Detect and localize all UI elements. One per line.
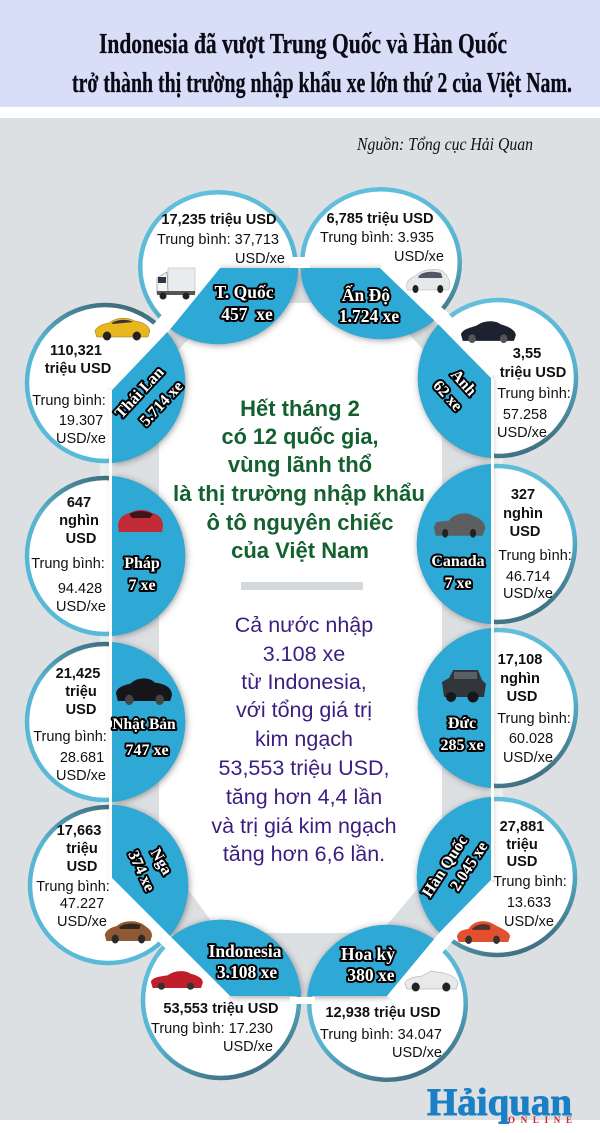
Ấn Độ values: 6,785 triệu USD — [326, 211, 434, 227]
Thái Lan values: triệu USD — [45, 361, 111, 377]
Thái Lan label — [112, 364, 187, 430]
country: Hàn Quốc — [419, 819, 567, 944]
central green heading: Hết tháng 2 — [240, 396, 360, 421]
central purple summary: kim ngạch — [255, 727, 353, 751]
Nga values: triệu — [66, 841, 98, 857]
central purple summary: với tổng giá trị — [236, 698, 372, 722]
T. Quốc label — [214, 282, 274, 324]
Nga values: USD/xe — [57, 914, 107, 930]
central purple summary: 3.108 xe — [263, 642, 345, 666]
source note: Nguồn: Tổng cục Hải Quan — [356, 134, 533, 154]
Ấn Độ values: USD/xe — [394, 249, 444, 265]
blue wedges — [103, 264, 516, 1002]
country: Pháp — [31, 495, 163, 615]
Nhật Bản label — [112, 716, 176, 759]
Ấn Độ values — [320, 211, 444, 265]
icon: orange beetle — [457, 921, 510, 944]
Indonesia values: 53,553 triệu USD — [163, 1001, 279, 1017]
Indonesia values: Trung bình: 17.230 — [151, 1021, 273, 1037]
Canada values: USD/xe — [503, 586, 553, 602]
Nga values: 47.227 — [60, 896, 104, 912]
Ấn Độ label — [339, 285, 399, 326]
Hàn Quốc values: USD/xe — [504, 914, 554, 930]
Canada values: 327 — [511, 487, 535, 503]
gray strips between circles — [100, 378, 503, 873]
Hàn Quốc values — [493, 819, 567, 930]
icon: red car — [118, 510, 163, 532]
country: Thái Lan — [32, 318, 187, 447]
Thái Lan label: 5.714 xe — [137, 378, 187, 430]
logo: ONLINE — [508, 1115, 572, 1125]
Nhật Bản values — [33, 666, 107, 784]
country: Nhật Bản — [33, 666, 176, 784]
header band — [0, 0, 600, 107]
icon: armored SUV — [442, 670, 486, 702]
central purple summary: tăng hơn 6,6 lần. — [223, 842, 385, 866]
Anh values: USD/xe — [497, 425, 547, 441]
country: Hoa Kỳ — [320, 944, 458, 1061]
Canada values: USD — [510, 524, 540, 540]
central purple summary: 53,553 triệu USD, — [219, 756, 389, 780]
Hoa Kỳ values: Trung bình: 34.047 — [320, 1027, 442, 1043]
icon: white convertible — [405, 971, 458, 992]
Nhật Bản values: Trung bình: — [33, 729, 107, 745]
Nga values: USD — [67, 859, 97, 875]
Nhật Bản label: Nhật Bản — [112, 716, 176, 733]
center octagon panel — [159, 303, 442, 933]
T. Quốc values: Trung bình: 37,713 — [157, 232, 279, 248]
Nga values — [36, 823, 110, 930]
Đức values: USD — [507, 689, 537, 705]
Đức values: 17,108 — [498, 652, 542, 668]
Hoa Kỳ values: 12,938 triệu USD — [325, 1005, 441, 1021]
icon: truck — [157, 268, 195, 300]
Anh values: 57.258 — [503, 407, 547, 423]
Pháp values — [31, 495, 106, 615]
Pháp values: 94.428 — [58, 581, 102, 597]
Thái Lan values: 110,321 — [50, 343, 102, 359]
title — [72, 29, 572, 99]
Hoa Kỳ label — [341, 944, 395, 985]
Indonesia values — [151, 1001, 279, 1055]
Hàn Quốc values: 27,881 — [500, 819, 544, 835]
Anh values: 3,55 — [513, 346, 541, 362]
Hoa Kỳ values — [320, 1005, 442, 1061]
central green heading: vùng lãnh thổ — [228, 452, 372, 477]
Ấn Độ values: Trung bình: 3.935 — [320, 230, 434, 246]
Hàn Quốc label: Hàn Quốc — [419, 833, 471, 900]
Indonesia label — [209, 941, 282, 982]
Pháp label — [124, 555, 160, 594]
Canada values: nghìn — [503, 506, 543, 522]
Canada values: Trung bình: — [498, 548, 572, 564]
country: T. Quốc — [157, 212, 285, 324]
Đức values: 60.028 — [509, 731, 553, 747]
Anh label: Anh — [447, 366, 480, 400]
central purple summary: và trị giá kim ngạch — [211, 814, 397, 838]
Canada values — [498, 487, 572, 602]
icon: yellow car — [95, 318, 150, 340]
Anh values — [497, 346, 571, 441]
logo: Hảiquan — [427, 1081, 572, 1124]
Pháp label: 7 xe — [128, 577, 156, 594]
Thái Lan values: USD/xe — [56, 431, 106, 447]
Hàn Quốc values: triệu — [506, 837, 538, 853]
Hoa Kỳ label: Hoa kỳ — [341, 944, 395, 964]
Pháp label: Pháp — [124, 555, 160, 572]
Hàn Quốc values: 13.633 — [507, 895, 551, 911]
divider — [241, 582, 363, 590]
central green heading: có 12 quốc gia, — [222, 424, 378, 449]
Hoa Kỳ values: USD/xe — [392, 1045, 442, 1061]
Canada label — [431, 553, 485, 592]
Ấn Độ label: Ấn Độ — [342, 285, 390, 305]
central green heading: là thị trường nhập khẩu — [173, 481, 425, 506]
Hàn Quốc values: Trung bình: — [493, 874, 567, 890]
T. Quốc label: 457 xe — [221, 304, 273, 324]
icon: brown SUV — [105, 921, 152, 944]
Pháp values: USD/xe — [56, 599, 106, 615]
Nga label: Nga — [147, 846, 175, 878]
Thái Lan label: Thái Lan — [112, 364, 168, 422]
Đức label: Đức — [448, 715, 476, 732]
Hoa Kỳ label: 380 xe — [347, 965, 395, 985]
country: Nga — [36, 823, 175, 944]
T. Quốc values: 17,235 triệu USD — [161, 212, 277, 228]
Pháp values: 647 — [67, 495, 91, 511]
circle rings — [27, 189, 576, 1080]
T. Quốc values: USD/xe — [235, 251, 285, 267]
country: Indonesia — [151, 941, 282, 1055]
Đức values: nghìn — [500, 671, 540, 687]
Nhật Bản values: USD — [66, 702, 96, 718]
Thái Lan values — [32, 343, 111, 447]
Đức label — [440, 715, 484, 754]
Anh label: 62 xe — [429, 377, 465, 415]
Anh values: triệu USD — [500, 365, 566, 381]
central purple summary: từ Indonesia, — [241, 670, 367, 694]
Đức values — [497, 652, 571, 766]
Nhật Bản values: 21,425 — [56, 666, 100, 682]
Thái Lan values: Trung bình: — [32, 393, 106, 409]
Hàn Quốc values: USD — [507, 854, 537, 870]
Đức label: 285 xe — [440, 737, 484, 754]
Canada label: 7 xe — [444, 575, 472, 592]
Nga values: 17,663 — [57, 823, 101, 839]
icon: grey limousine — [434, 513, 485, 538]
Nhật Bản values: triệu — [65, 684, 97, 700]
Hàn Quốc label: 2.045 xe — [447, 839, 491, 894]
Pháp values: USD — [66, 531, 96, 547]
central green heading: của Việt Nam — [231, 538, 369, 563]
central purple summary: Cả nước nhập — [235, 613, 373, 637]
Pháp values: Trung bình: — [31, 556, 105, 572]
Nhật Bản values: USD/xe — [56, 768, 106, 784]
icon: white car — [406, 269, 450, 293]
country: Ấn Độ — [320, 211, 450, 326]
Đức values: Trung bình: — [497, 711, 571, 727]
icon: dark sedan — [461, 321, 516, 343]
Nga label: 374 xe — [124, 848, 158, 894]
Nga values: Trung bình: — [36, 879, 110, 895]
Nhật Bản values: 28.681 — [60, 750, 104, 766]
central purple summary: tăng hơn 4,4 lần — [226, 785, 382, 809]
connecting white strips — [104, 257, 498, 1004]
Thái Lan values: 19.307 — [59, 413, 103, 429]
Canada values: 46.714 — [506, 569, 550, 585]
Nga label — [124, 846, 175, 894]
Anh label — [429, 366, 480, 415]
Ấn Độ label: 1.724 xe — [339, 306, 399, 326]
T. Quốc values — [157, 212, 285, 267]
T. Quốc label: T. Quốc — [214, 282, 274, 302]
country: Canada — [431, 487, 572, 602]
country: Đức — [440, 652, 571, 766]
Anh values: Trung bình: — [497, 386, 571, 402]
Đức values: USD/xe — [503, 750, 553, 766]
icon: black car — [116, 678, 172, 705]
icon: red sedan — [151, 971, 203, 990]
Indonesia label: 3.108 xe — [217, 962, 277, 982]
central purple summary — [211, 613, 397, 866]
country: Anh — [429, 321, 571, 441]
Indonesia label: Indonesia — [209, 941, 282, 961]
Nhật Bản label: 747 xe — [125, 742, 169, 759]
Pháp values: nghìn — [59, 513, 99, 529]
central green heading: ô tô nguyên chiếc — [206, 510, 394, 535]
Indonesia values: USD/xe — [223, 1039, 273, 1055]
Canada label: Canada — [431, 553, 485, 570]
central green heading — [173, 396, 425, 563]
